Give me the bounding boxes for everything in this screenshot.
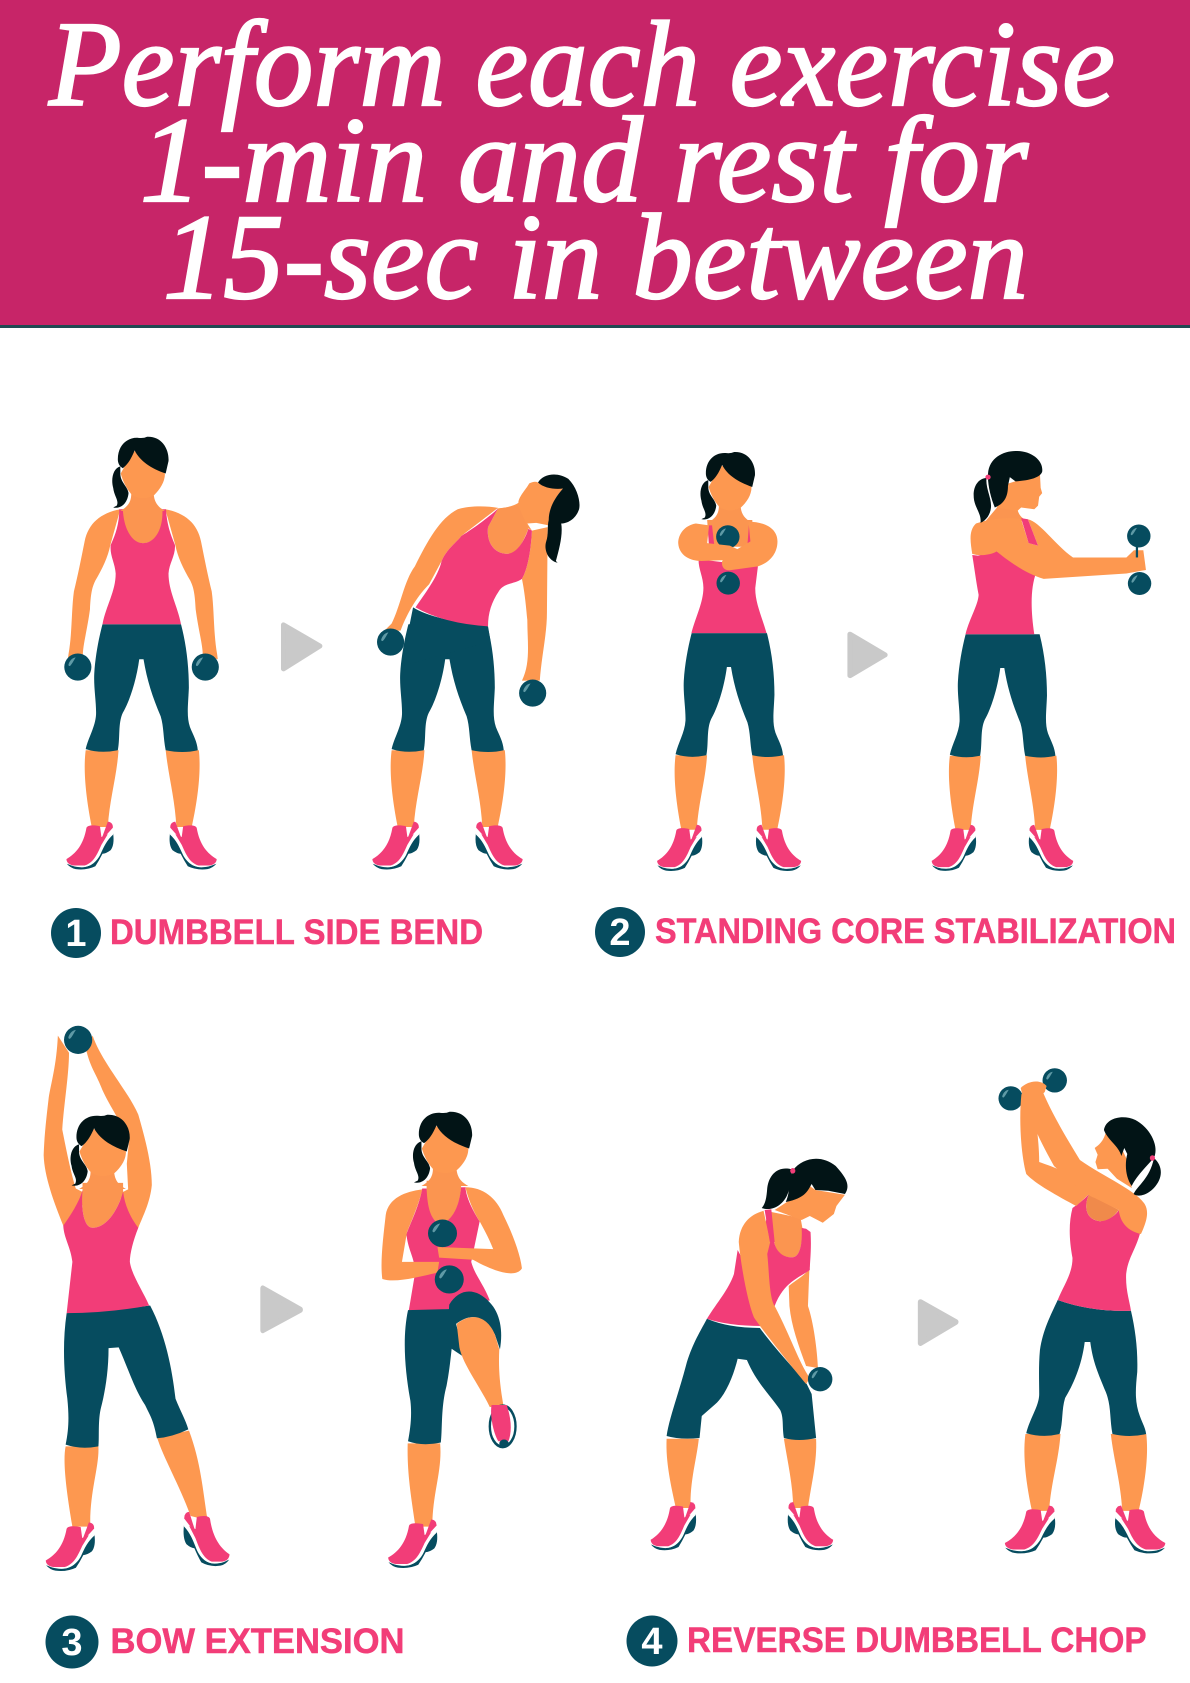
figure: exercise 4 raised chop pose	[998, 1068, 1165, 1553]
label: exercise 1: 1	[65, 913, 87, 955]
figure: exercise 4 bent chop pose	[651, 1159, 847, 1550]
figure: exercise 1 side bend pose	[372, 474, 580, 869]
label: exercise 4: 4	[641, 1621, 663, 1663]
figure: exercise 1 start pose	[64, 437, 219, 869]
title: Perform each exercise	[48, 0, 1115, 132]
label: exercise 3: 3	[61, 1622, 83, 1664]
title	[48, 0, 1115, 325]
label: exercise 3	[46, 1616, 404, 1668]
arrow: exercise 3	[263, 1288, 301, 1330]
title: 15-sec in between	[163, 190, 1028, 325]
figure: exercise 3 knee raise pose	[382, 1112, 522, 1568]
label: exercise 3: BOW EXTENSION	[110, 1622, 404, 1661]
label: exercise 2: 2	[609, 912, 631, 954]
label: exercise 2	[595, 907, 1176, 957]
label: exercise 4: REVERSE DUMBBELL CHOP	[687, 1621, 1146, 1660]
arrow: exercise 4	[920, 1302, 956, 1343]
figure: exercise 2 arms extended pose	[932, 451, 1151, 871]
title: 1-min and rest for	[140, 93, 1029, 228]
label: exercise 1: DUMBBELL SIDE BEND	[110, 913, 483, 952]
arrow: exercise 2	[850, 634, 885, 676]
figure: exercise 2 start pose	[657, 452, 801, 871]
label: exercise 4	[626, 1616, 1146, 1666]
label: exercise 1	[51, 908, 483, 958]
figure: exercise 3 arms overhead pose	[44, 1026, 230, 1571]
arrow: exercise 1	[283, 625, 320, 669]
header banner	[0, 0, 1190, 328]
